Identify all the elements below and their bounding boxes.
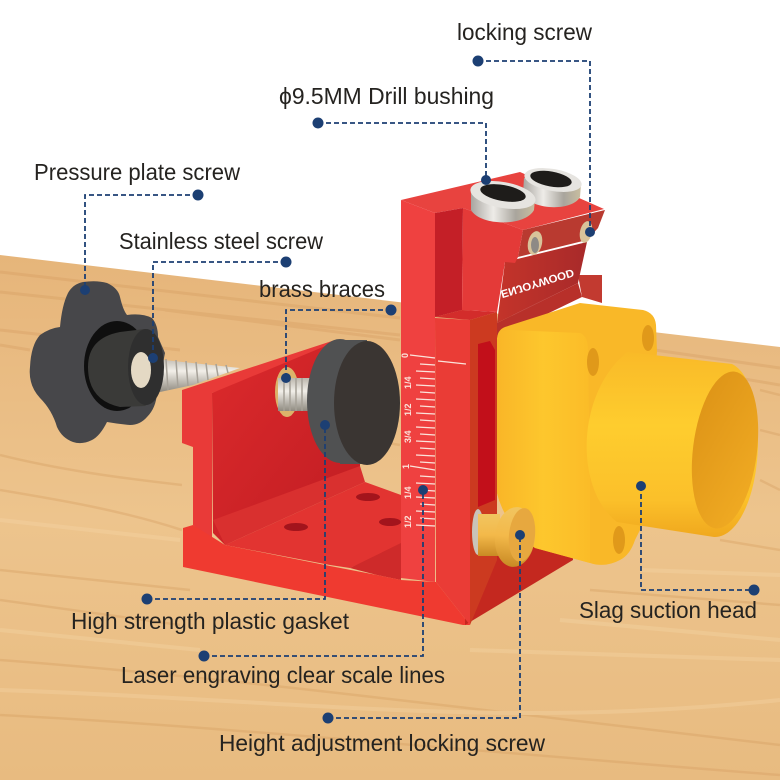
scale numbers: 1/2 [403, 515, 413, 528]
scale numbers: 1/4 [403, 486, 413, 499]
scale numbers: 0 [400, 353, 410, 358]
black star knob [30, 281, 165, 443]
wood table background [0, 255, 780, 780]
label: pressure plate screw: Pressure plate screw [34, 159, 240, 185]
label: slag suction head: Slag suction head [579, 597, 757, 623]
drill bushings [468, 164, 583, 222]
label: locking screw: locking screw [457, 19, 592, 45]
brand text: ENJOYWOOD [499, 266, 575, 300]
scale numbers: 1/2 [403, 403, 413, 416]
black plastic gasket knob [307, 339, 400, 465]
slag suction head [497, 303, 766, 565]
scale numbers [400, 353, 413, 528]
threaded rod and brace [135, 357, 310, 417]
scale numbers: 1/4 [403, 376, 413, 389]
label: drill bushing: ϕ9.5MM Drill bushing [279, 83, 494, 109]
callout dots [80, 56, 760, 724]
label: height adjustment: Height adjustment locking screw [219, 730, 545, 756]
scale numbers: 3/4 [403, 430, 413, 443]
jig: base bracket [182, 340, 470, 625]
label: brass braces: brass braces [259, 276, 385, 302]
brass locking knob [472, 505, 538, 569]
label: stainless steel screw: Stainless steel screw [119, 228, 323, 254]
scale numbers: 1 [401, 464, 411, 469]
scale ticks [410, 355, 466, 526]
label: laser engraving: Laser engraving clear scale lines [121, 662, 445, 688]
label: high strength plastic gasket: High strength plastic gasket [71, 608, 350, 634]
callout lines [85, 61, 754, 718]
jig: vertical column [400, 172, 605, 625]
